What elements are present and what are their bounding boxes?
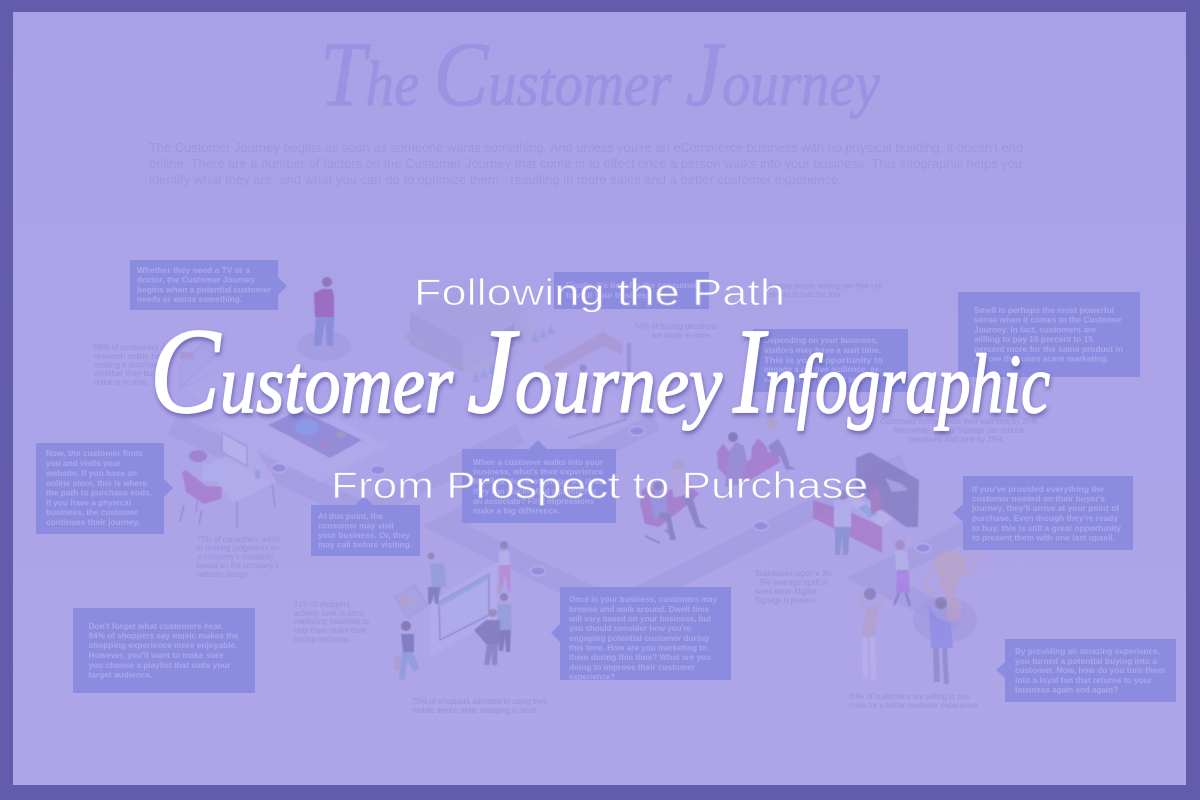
callout: point of purchase: If you've provided everything the	[972, 484, 1104, 494]
phone platform and screen	[210, 390, 388, 482]
trophy and celebrating customers	[861, 532, 977, 684]
stat: wait time perception: Meanwhile, Digital Signage can reduce	[894, 425, 1024, 435]
callout: walks into business: like? Is there signage so that	[473, 476, 602, 486]
callout: customer need: Whether they need a TV or a	[137, 265, 250, 275]
main title: customer journey infographic: Customer	[150, 304, 453, 439]
callout: browsing and dwell time: Once in your business, customers may	[569, 594, 717, 604]
isometric journey illustration	[172, 277, 977, 684]
callout: customer need	[130, 260, 287, 310]
callout: smell: Smell is perhaps the most powerful	[974, 305, 1114, 315]
callout: smell: willing to pay 10 percent to 15	[973, 334, 1093, 344]
stat: in-store marketing materials: buying decisions.	[294, 634, 351, 644]
callout: visits website: online store, this is where	[46, 478, 147, 488]
faded infographic title: The Customer Journey	[320, 23, 881, 125]
callout: music: Don't forget what customers hear.	[88, 621, 224, 631]
stat: wait time perception: Customers overestimate their wait time by 25%.	[880, 416, 1039, 426]
stat: in-store marketing materials: actively seek in-store	[294, 608, 364, 618]
stat: website credibility: to making judgments on	[197, 543, 279, 553]
stat: people waiting use phones: phones to pass the time.	[769, 289, 842, 299]
stat: in-store marketing materials: help them make their	[294, 625, 366, 635]
laptop research illustration	[180, 330, 245, 405]
callout: may visit or call: your business. Or, they	[318, 530, 410, 540]
callout: music: you choose a playlist that suits your	[88, 660, 231, 670]
reception desk	[813, 452, 919, 555]
stat: website credibility: website design	[196, 569, 248, 579]
callout: point of purchase: to buy, this is still a great opportunity	[972, 523, 1121, 533]
callout: customer need: doctor, the Customer Journey	[137, 275, 255, 285]
callout: browsing and dwell time	[551, 587, 731, 682]
stat: online research: whether they buy	[93, 368, 158, 378]
stat: people waiting use phones: Seated people waiting use their cell	[769, 281, 882, 291]
journey path	[172, 421, 970, 622]
callout: visits website: continues their journey.	[46, 517, 140, 527]
callout: loyal fan: you turned a potential buying into a	[1015, 656, 1157, 666]
stat: mobile device use	[412, 696, 548, 715]
first customer standing on base	[297, 277, 351, 361]
faded intro paragraph: online. There are a number of factors on the Customer Journey that come in to effect once a person walks into your business. This infographic helps you	[149, 157, 1022, 171]
stat: digital signage uplift: Businesses report a 3%	[755, 568, 832, 578]
callout: browsing and dwell time: doing to improve their customer	[569, 662, 696, 672]
stat: online research: online or in-store.	[94, 377, 149, 387]
stat: buying decisions in-store: 74% of buying decisions	[634, 321, 717, 331]
callout: loyal fan: into a loyal fan that returns to your	[1015, 675, 1153, 685]
callout: point of purchase: to present them with one last upsell.	[972, 533, 1115, 543]
store entrance arch	[540, 332, 650, 446]
callout: music: shopping experience more enjoyable.	[88, 640, 238, 650]
callout: browsing and dwell time: them during this time? What are you	[569, 652, 711, 662]
callout: walks into business: an associate? First impressions	[473, 496, 594, 506]
stat: online research: 88% of consumers do	[94, 342, 169, 352]
callout: smell: Journey. In fact, customers are	[974, 324, 1096, 334]
path markers	[272, 372, 930, 576]
callout: browsing and dwell time: you should consider how you're	[569, 623, 691, 633]
callout: visits website: Now, the customer finds	[46, 448, 143, 458]
stat: digital signage uplift: - 5% average uplift in	[755, 577, 828, 587]
main title: customer journey infographic	[150, 304, 1050, 439]
callout: walks into business	[462, 440, 616, 523]
subheading: from prospect to purchase: From Prospect to Purchase	[331, 465, 868, 506]
stat: website credibility	[196, 534, 281, 579]
waiting room seats and people	[640, 418, 796, 543]
callout: smell: sense when it comes to the Customer	[974, 315, 1123, 325]
callout: loyal fan	[996, 639, 1176, 702]
callout: smell: percent more for the same product in	[974, 344, 1123, 354]
stat: website credibility: based on the company's	[197, 560, 279, 570]
callout: may visit or call	[311, 496, 420, 556]
callout: browsing and dwell time: browse and walk around. Dwell time	[569, 604, 709, 614]
callout: browsing and dwell time: will vary based on your business, but	[568, 614, 711, 624]
callout: music: 84% of shoppers say music makes the	[88, 631, 239, 641]
callout: time to visit: Finally, it's time for the consumer	[566, 280, 698, 290]
main title: customer journey infographic: Journey	[467, 304, 723, 439]
callout: loyal fan: business again and again?	[1015, 685, 1118, 695]
stat: in-store marketing materials	[294, 599, 369, 644]
heading: following the path: Following the Path	[414, 272, 785, 313]
callout: visits website: business, the customer	[46, 507, 139, 517]
stat: in-store marketing materials: 71% of shoppers	[294, 599, 350, 609]
callout: wait time: well as improve their service.	[763, 374, 879, 384]
callout: visits website: the path to purchase ends.	[46, 488, 152, 498]
callout: point of purchase: purchase. Even though they're ready	[972, 513, 1118, 523]
callout: walks into business: make a big difference.	[473, 506, 560, 516]
store building	[403, 280, 555, 382]
callout: visits website	[36, 443, 173, 534]
stat: wait time perception	[880, 416, 1039, 444]
callout: visits website: If you have a physical	[46, 498, 131, 508]
stat: digital signage uplift	[755, 568, 832, 605]
stat: online research: research online before	[94, 351, 174, 361]
stat: digital signage uplift: Signage is present.	[755, 595, 817, 605]
callout: loyal fan: By providing an amazing experience,	[1015, 646, 1160, 656]
faded intro paragraph: identify what they are, and what you can do to optimize them - resulting in more sales and a better customer experience.	[149, 173, 842, 187]
callout: browsing and dwell time: experience?	[569, 672, 615, 682]
stat: wait time perception: perceived wait time by 25%.	[909, 434, 1005, 444]
stat: buying decisions in-store	[634, 321, 717, 340]
stat: in-store marketing materials: marketing materials to	[294, 616, 369, 626]
callout: walks into business: they can quickly find a product or	[473, 486, 598, 496]
stat: better experience: 60% of customers are willing to pay	[849, 691, 971, 701]
callout: customer need: needs or wants something.	[137, 294, 242, 304]
callout: point of purchase: journey, they'll arrive at your point of	[971, 503, 1119, 513]
signage and shoppers	[394, 541, 512, 680]
stat: better experience: more for a better customer experience.	[849, 700, 980, 710]
callout: point of purchase: customer needed on their buyer's	[972, 494, 1105, 504]
callout: walks into business: When a customer walks into your	[473, 457, 604, 467]
callout: visits website: website. If you have an	[45, 468, 137, 478]
callout: may visit or call: may call before visiting.	[318, 540, 412, 550]
callout: smell: a store that uses scent marketing.	[974, 354, 1109, 364]
stat: partly hidden households note: households	[380, 407, 430, 417]
callout: may visit or call: At this point, the	[318, 511, 383, 521]
callout: music	[73, 608, 255, 693]
main title: customer journey infographic: Infographic	[732, 304, 1050, 439]
callout: loyal fan: customer. Now, how do you turn them	[1015, 665, 1165, 675]
stat: people waiting use phones	[769, 281, 882, 299]
callout: music: target audience.	[88, 670, 152, 680]
callout: wait time: Depending on your business,	[764, 335, 878, 345]
stat: website credibility: 75% of consumers admit	[197, 534, 281, 544]
stat: buying decisions in-store: are made in-store.	[651, 330, 712, 340]
callout: customer need: begins when a potential customer	[137, 284, 272, 294]
stat: digital signage uplift: sales when Digital	[755, 586, 816, 596]
stat: online research	[93, 342, 174, 387]
faded intro paragraph	[149, 141, 1023, 187]
customer at desk	[180, 433, 277, 529]
stat: mobile device use: 75% of shoppers admitted to using their	[412, 696, 548, 706]
callout: time to visit: to visit your business.	[566, 290, 653, 300]
callout: time to visit	[554, 272, 709, 309]
callout: wait time: This is your opportunity to	[764, 355, 883, 365]
faded intro paragraph: The Customer Journey begins as soon as someone wants something. And unless you're an eCommerce business with no physical building, it doesn't end	[149, 141, 1023, 155]
stat: website credibility: a company's credibility	[197, 551, 275, 561]
callout: music: However, you'll want to make sure	[88, 650, 224, 660]
callout: wait time: visitors may have a wait time.	[764, 345, 881, 355]
callout: wait time	[753, 329, 908, 392]
callout: wait time: engage a captive audience, as	[764, 364, 879, 374]
callout: may visit or call: consumer may visit	[318, 520, 394, 530]
stat: better experience	[849, 691, 980, 710]
callout: browsing and dwell time: engaging potential customer during	[569, 633, 709, 643]
callout: smell	[958, 292, 1140, 377]
callout: browsing and dwell time: this time. How are you marketing to	[569, 643, 707, 653]
stat: online research: making a purchase,	[94, 360, 164, 370]
callout: visits website: you and visits your	[46, 458, 122, 468]
callout: point of purchase	[953, 476, 1133, 550]
callout: walks into business: business, what's their experience	[473, 467, 603, 477]
stat: mobile device use: mobile device while shopping in store.	[412, 705, 539, 715]
